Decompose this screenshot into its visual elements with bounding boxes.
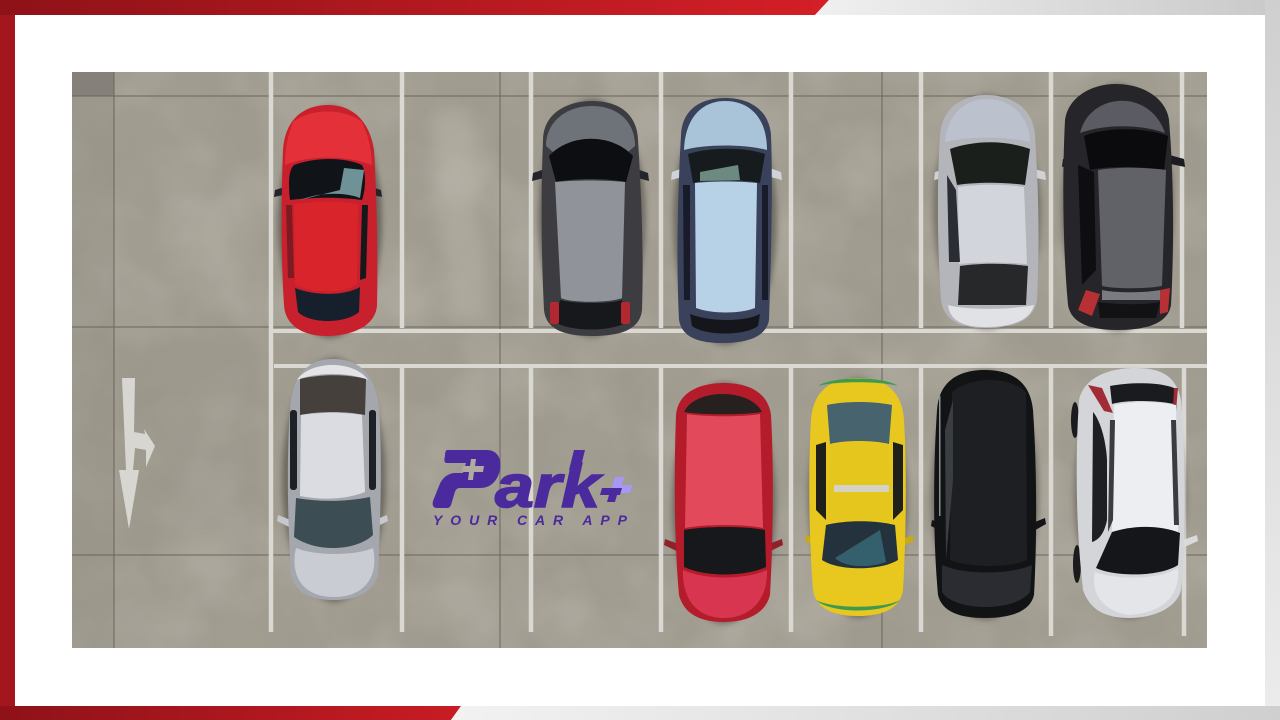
road arrow marking (119, 378, 155, 529)
car: pink-red hatchback bottom row (664, 382, 783, 624)
car: silver sedan top row (933, 94, 1046, 330)
car: white-silver sedan bottom row (277, 358, 388, 602)
car: charcoal SUV top row (1062, 84, 1185, 332)
logo tagline: YOUR CAR APP (433, 512, 628, 528)
car: light blue van (671, 98, 782, 345)
car: yellow taxi (805, 378, 914, 618)
car: dark grey hatchback (532, 99, 649, 337)
logo plus symbol (600, 477, 632, 502)
logo wordmark: ark (495, 453, 603, 520)
car: red hatchback (274, 105, 382, 338)
logo: Park+ Your Car App (433, 450, 632, 528)
photo: parking lot pavement (72, 72, 1207, 648)
car: white SUV (1071, 368, 1198, 619)
logo letter P with plus cut-out (433, 450, 500, 508)
car: black SUV (931, 370, 1046, 620)
